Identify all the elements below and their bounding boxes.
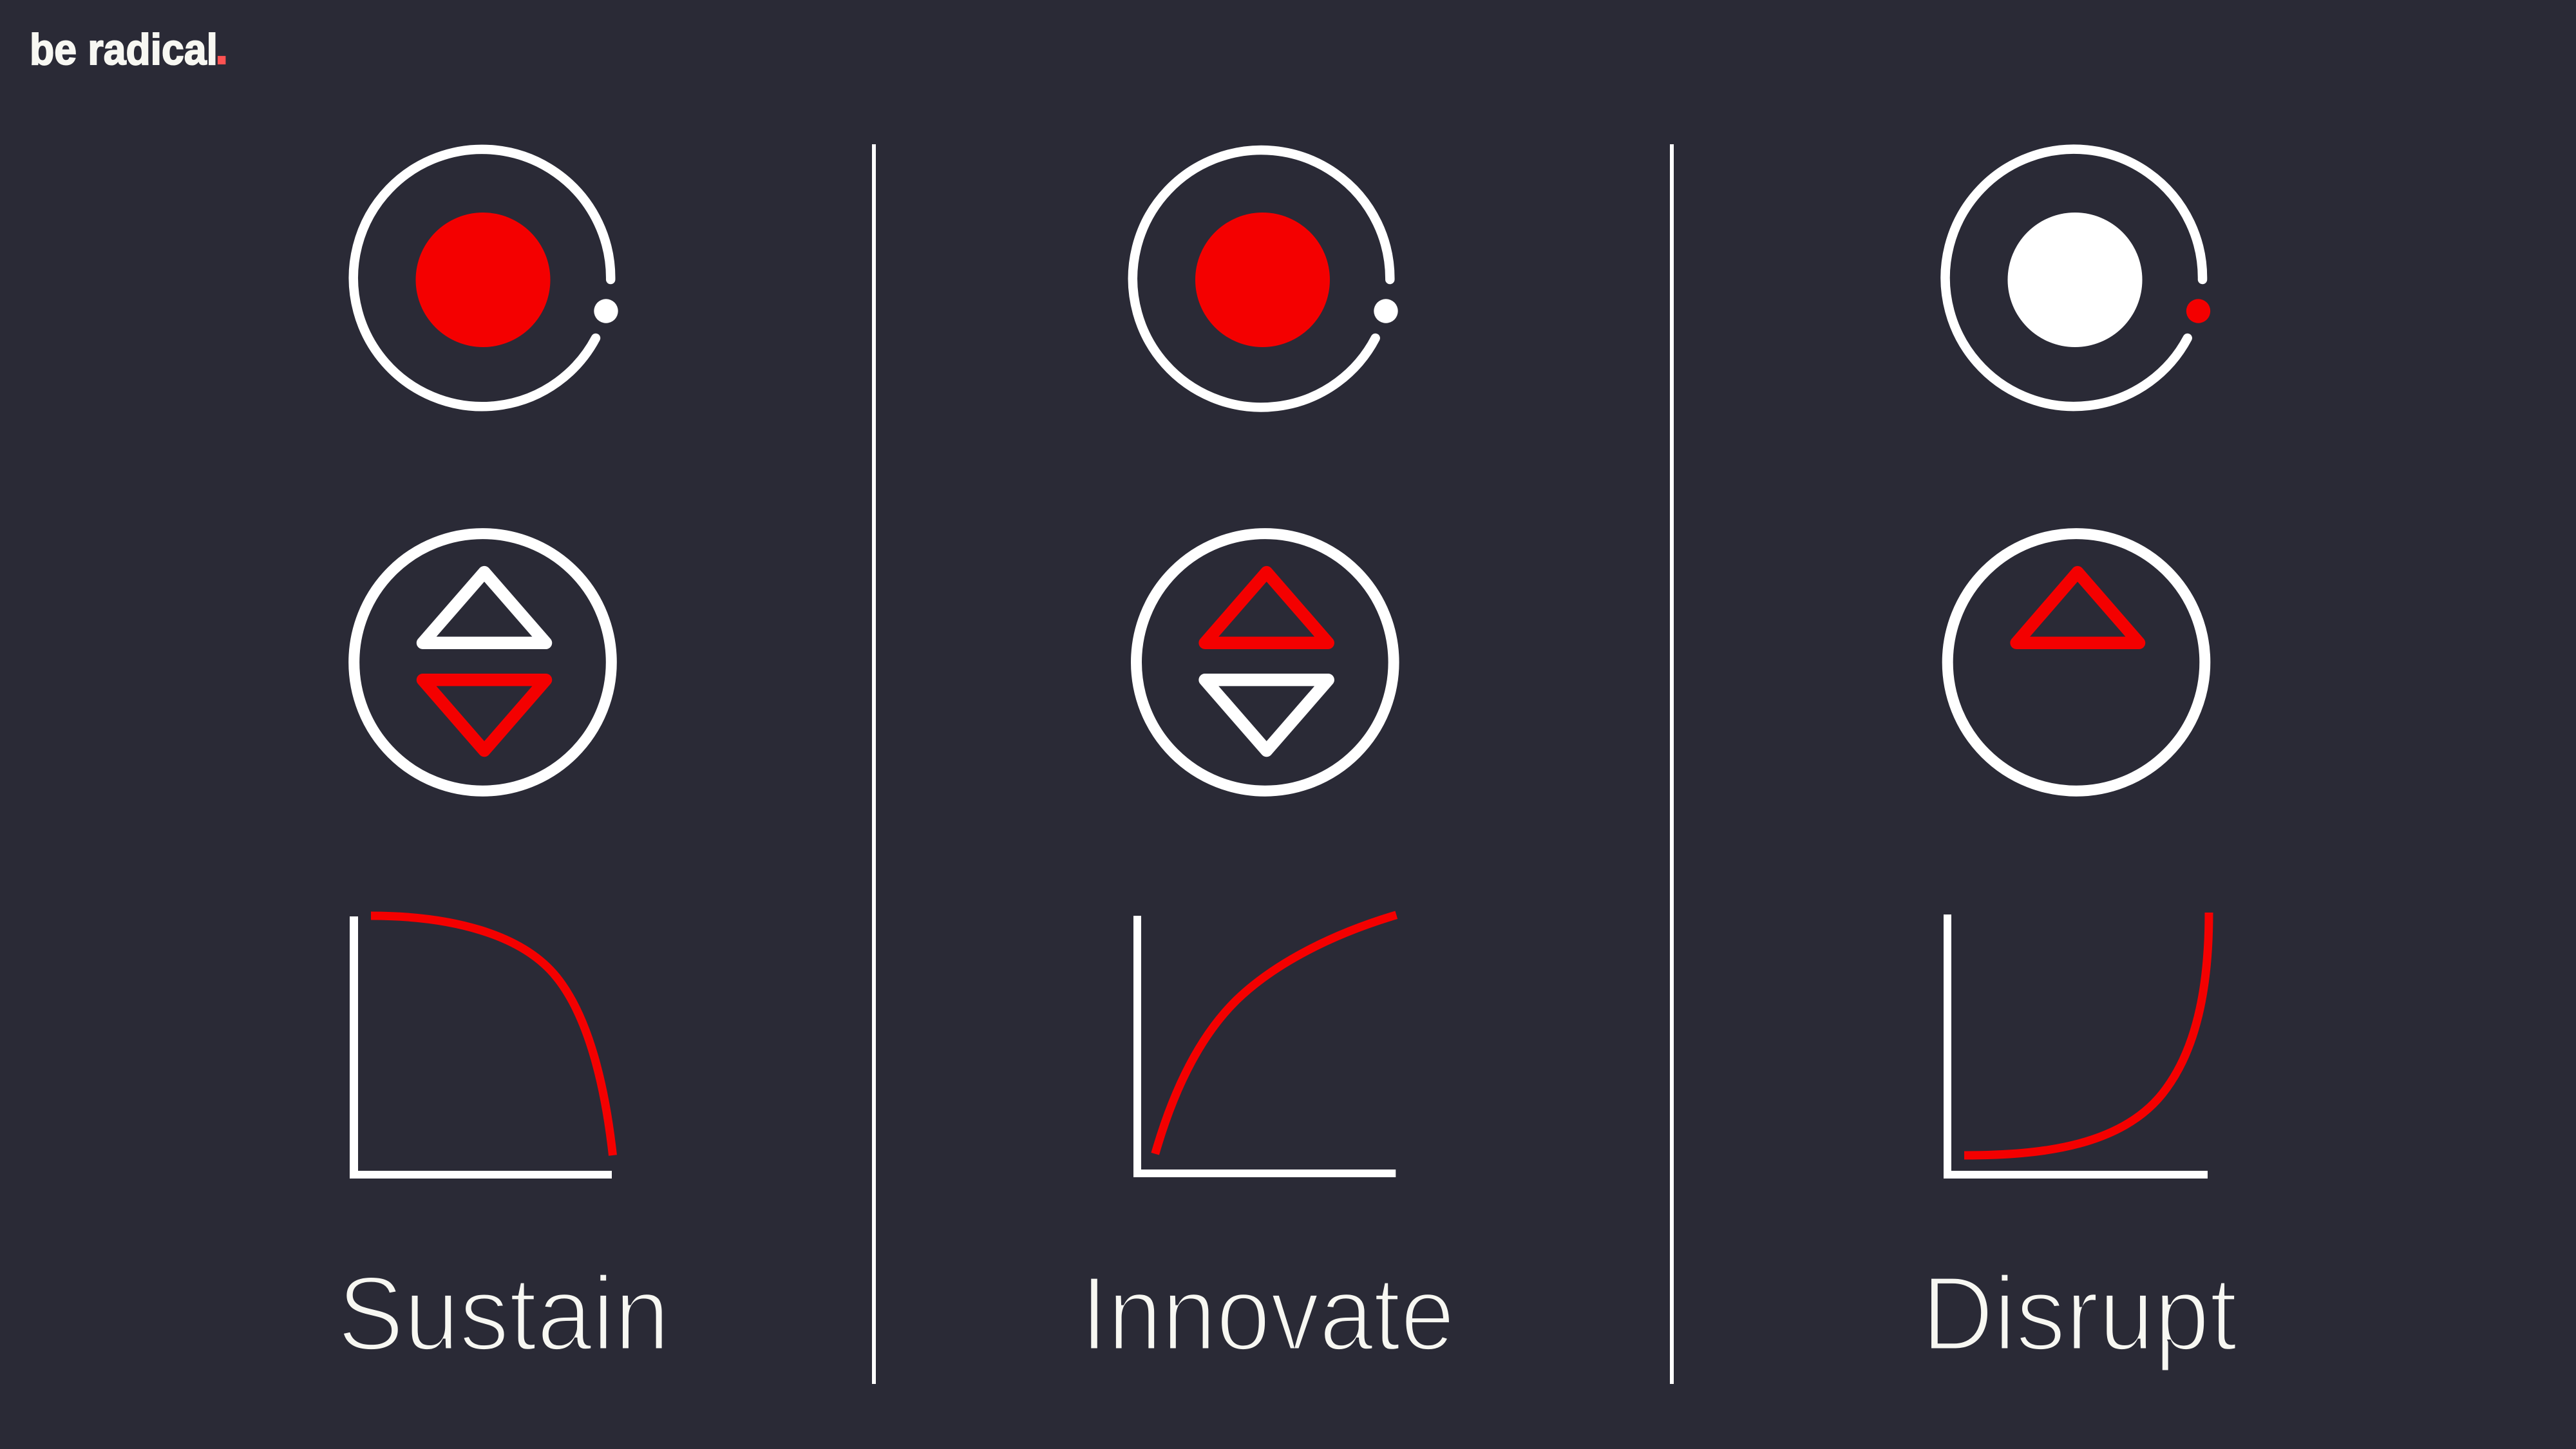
icon: disrupt single red up triangle <box>1947 534 2205 791</box>
label: Innovate: Innovate <box>1081 1255 1455 1372</box>
logo: be radical.: . <box>214 13 229 77</box>
chart: sustain declining curve <box>350 916 613 1179</box>
icon: innovate triangles, up red and down white <box>1136 534 1394 791</box>
icon: sustain ring with red core and white dot <box>354 149 618 406</box>
icon: sustain triangles, up white and down red <box>354 534 611 791</box>
chart: disrupt exponential curve <box>1944 913 2209 1179</box>
label: Disrupt: Disrupt <box>1922 1255 2237 1372</box>
label: Sustain: Sustain <box>337 1255 670 1372</box>
chart: innovate rising logarithmic curve <box>1133 915 1396 1177</box>
icon: innovate ring with red core and white dot <box>1133 150 1398 407</box>
panel: disrupt <box>1922 149 2237 1372</box>
panel: innovate <box>1081 150 1455 1372</box>
logo: be radical.: be radical <box>30 25 218 74</box>
panel: sustain <box>337 149 670 1372</box>
icon: disrupt ring with white core and red dot <box>1946 149 2210 406</box>
